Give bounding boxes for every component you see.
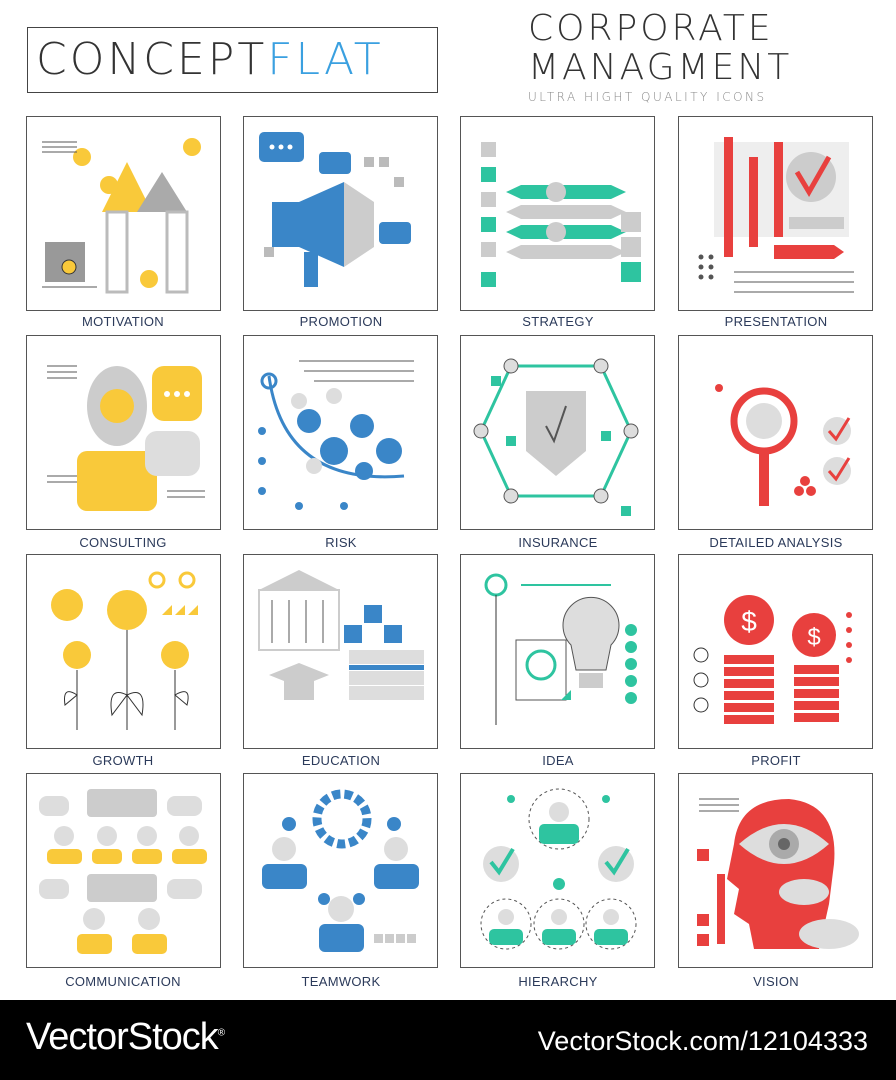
header box: concept flat: CONCEPTFLAT <box>36 34 384 85</box>
panel: consulting <box>26 335 221 530</box>
label: education: EDUCATION <box>302 753 380 768</box>
panel: profit: $ <box>741 606 757 637</box>
panel: growth <box>26 554 221 749</box>
panel: teamwork <box>243 773 438 968</box>
panel: profit <box>678 554 873 749</box>
panel: communication <box>26 773 221 968</box>
label: teamwork: TEAMWORK <box>302 974 380 989</box>
label: strategy: STRATEGY <box>522 314 594 329</box>
footer bar <box>0 1000 896 1080</box>
label: presentation: PRESENTATION <box>725 314 827 329</box>
footer id: VectorStock.com/12104333 <box>538 1026 868 1056</box>
panel: motivation <box>26 116 221 311</box>
header title: corporate managment: ULTRA HIGHT QUALITY ICONS <box>528 90 767 104</box>
panel: education <box>243 554 438 749</box>
label: vision: VISION <box>753 974 799 989</box>
label: promotion: PROMOTION <box>300 314 382 329</box>
label: risk: RISK <box>325 535 357 550</box>
panel: risk <box>243 335 438 530</box>
label: communication: COMMUNICATION <box>65 974 181 989</box>
label: consulting: CONSULTING <box>79 535 167 550</box>
panel: idea <box>460 554 655 749</box>
panel: vision <box>678 773 873 968</box>
header title: corporate managment: CORPORATE <box>528 8 774 49</box>
label: motivation: MOTIVATION <box>82 314 164 329</box>
label: profit: PROFIT <box>751 753 801 768</box>
label: idea: IDEA <box>542 753 574 768</box>
panel: presentation <box>678 116 873 311</box>
panel: insurance <box>460 335 655 530</box>
panel: detailed analysis <box>678 335 873 530</box>
header title: corporate managment: MANAGMENT <box>528 47 792 88</box>
panel: strategy <box>460 116 655 311</box>
label: hierarchy: HIERARCHY <box>518 974 598 989</box>
panel: hierarchy <box>460 773 655 968</box>
label: detailed analysis: DETAILED ANALYSIS <box>709 535 843 550</box>
panel: promotion <box>243 116 438 311</box>
header box: concept flat <box>27 27 438 93</box>
label: growth: GROWTH <box>92 753 154 768</box>
label: insurance: INSURANCE <box>518 535 598 550</box>
footer brand: VectorStock® <box>26 1016 224 1058</box>
header title: corporate managment <box>528 8 792 104</box>
panel: profit: $ <box>807 624 821 651</box>
